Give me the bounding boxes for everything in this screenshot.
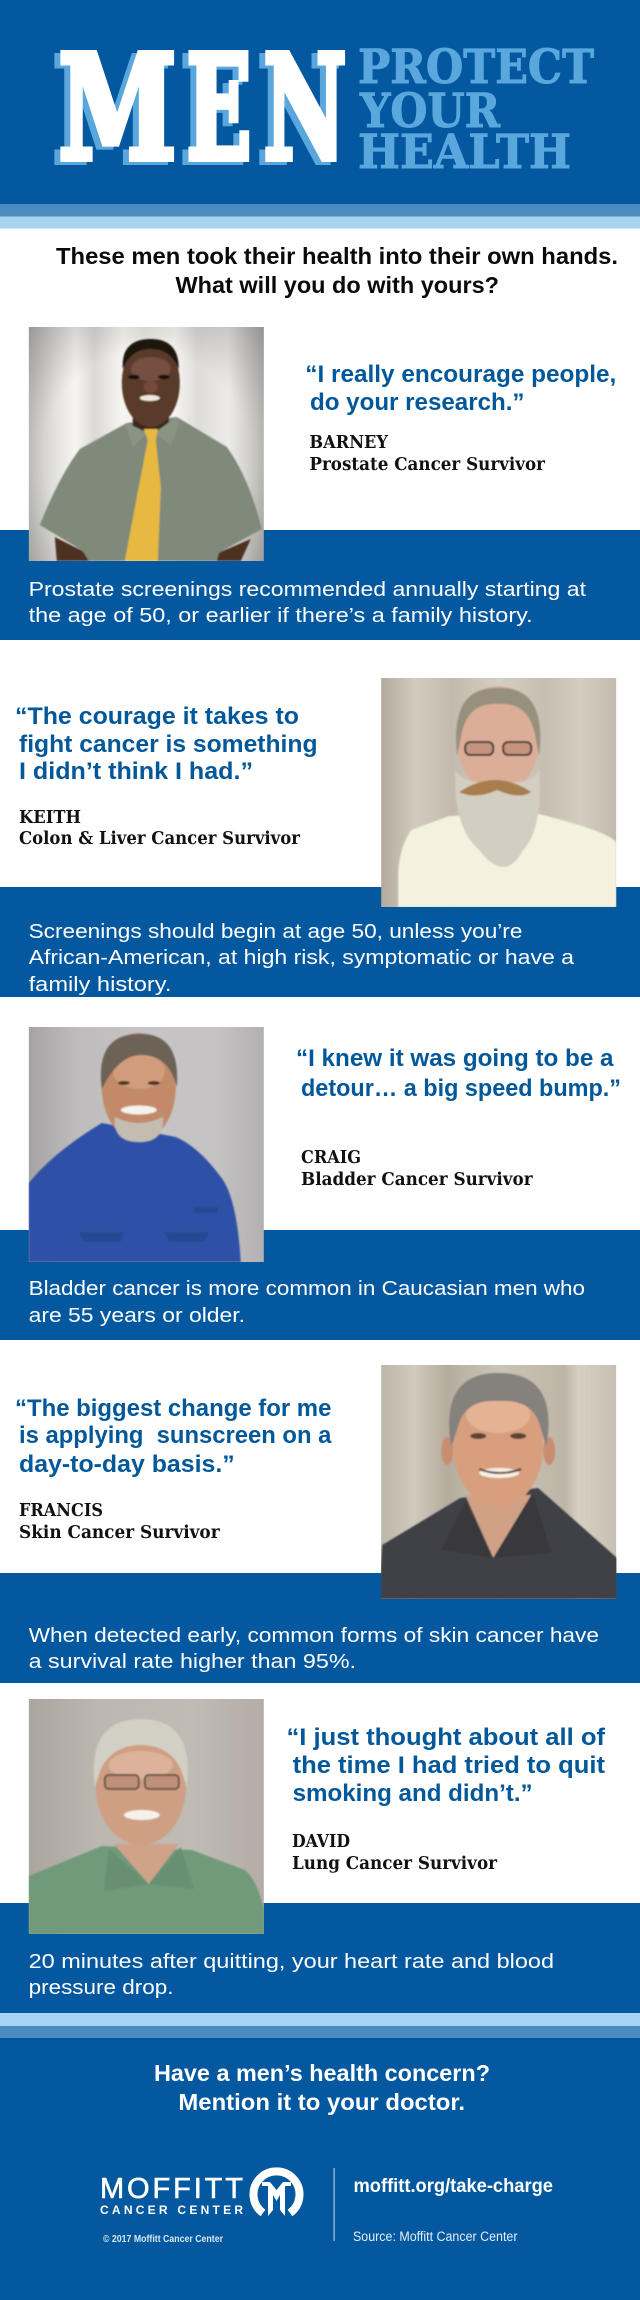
panel: Francis [0,1365,640,1683]
intro text: What will you do with yours? [176,272,499,298]
panel: David [0,1699,640,2013]
panel: Keith [0,678,640,997]
call to action: Have a men’s health concern? [154,2060,490,2086]
name: David: Lung Cancer Survivor [292,1854,498,1874]
name: Craig: CRAIG [301,1148,361,1168]
title: MEN [52,24,346,196]
title: MEN: E [186,24,252,192]
call to action: Mention it to your doctor. [178,2089,465,2115]
quote: Keith: fight cancer is something [19,731,318,758]
photo: David [28,1699,264,1934]
quote: Francis: day-to-day basis.” [19,1451,235,1478]
copyright: © 2017 Moffitt Cancer Center [103,2234,223,2245]
panel: Barney [0,327,640,640]
quote: Craig [296,1045,621,1102]
quote: Craig: detour… a big speed bump.” [301,1075,621,1102]
quote: David [286,1724,606,1807]
quote: David: the time I had tried to quit [293,1752,605,1779]
name: Barney [309,433,546,475]
name: Francis [19,1501,220,1543]
fact band: lung: pressure drop. [29,1976,173,1999]
quote: David: “I just thought about all of [286,1724,606,1751]
photo: Craig [28,1027,264,1262]
quote: Craig: “I knew it was going to be a [296,1045,614,1072]
fact band: lung [0,1903,640,2013]
fact band: prostate: Prostate screenings recommended annually starting at [29,578,586,601]
photo: Keith [381,678,616,907]
quote: Francis: is applying sunscreen on a [19,1422,332,1449]
fact band: colon: Screenings should begin at age 50, unless you’re [29,920,522,943]
icon: Moffitt ring mark [254,2171,300,2216]
header banner [0,0,640,228]
name: Keith [19,808,301,849]
fact band: prostate [0,530,640,640]
quote: Keith: “The courage it takes to [15,703,299,730]
quote: David: smoking and didn’t.” [293,1780,533,1807]
fact band: lung: 20 minutes after quitting, your heart rate and blood [29,1950,554,1973]
name: Keith: Colon & Liver Cancer Survivor [19,829,301,849]
fact band: skin: When detected early, common forms of skin cancer have [29,1624,599,1647]
title: protect your health: HEALTH [358,125,571,180]
quote: Francis [15,1395,332,1478]
title: protect your health: PROTECT [358,40,594,95]
fact band: colon: family history. [29,973,171,996]
name: David [292,1832,498,1874]
name: Barney: BARNEY [309,433,388,453]
name: Francis: Skin Cancer Survivor [19,1523,220,1543]
quote: Keith: I didn’t think I had.” [19,758,253,785]
logo: Moffitt Cancer Center [100,2171,300,2217]
quote: Francis: “The biggest change for me [15,1395,331,1422]
name: Francis: FRANCIS [19,1501,103,1521]
quote: Barney [305,361,616,416]
intro text: These men took their health into their own hands. [56,243,618,269]
fact band: bladder: Bladder cancer is more common in Caucasian men who [29,1277,585,1300]
title: MEN: N [258,26,340,196]
fact band: skin: a survival rate higher than 95%. [29,1650,356,1673]
name: Keith: KEITH [19,808,81,828]
title: MEN: M [58,24,176,192]
quote: Barney: “I really encourage people, [305,361,616,388]
photo: Francis [381,1365,616,1599]
title: MEN: E [180,26,246,196]
source: Source: Moffitt Cancer Center [353,2229,518,2244]
footer panel [0,2013,640,2300]
fact band: prostate: the age of 50, or earlier if there’s a family history. [29,604,533,627]
title: MEN: N [264,24,346,192]
name: Barney: Prostate Cancer Survivor [309,455,546,475]
logo: Moffitt Cancer Center: MOFFITT [100,2173,243,2205]
fact band: bladder [0,1230,640,1340]
name: David: DAVID [292,1832,350,1852]
name: Craig [301,1148,533,1190]
title: MEN: M [52,26,170,196]
title: protect your health: YOUR [359,84,501,139]
fact band: colon: African-American, at high risk, symptomatic or have a [29,946,575,969]
quote: Keith [15,703,318,785]
panel: Craig [0,1027,640,1340]
website link: moffitt.org/take-charge [354,2176,553,2197]
photo: Barney [28,327,264,561]
fact band: bladder: are 55 years or older. [29,1304,245,1327]
fact band: skin [0,1573,640,1683]
quote: Barney: do your research.” [310,389,524,416]
intro text [56,243,618,298]
call to action [154,2060,490,2115]
fact band: colon [0,887,640,997]
name: Craig: Bladder Cancer Survivor [301,1170,533,1190]
divider [334,2168,335,2241]
logo: Moffitt Cancer Center: CANCER CENTER [100,2203,243,2217]
title: protect your health [358,40,594,180]
